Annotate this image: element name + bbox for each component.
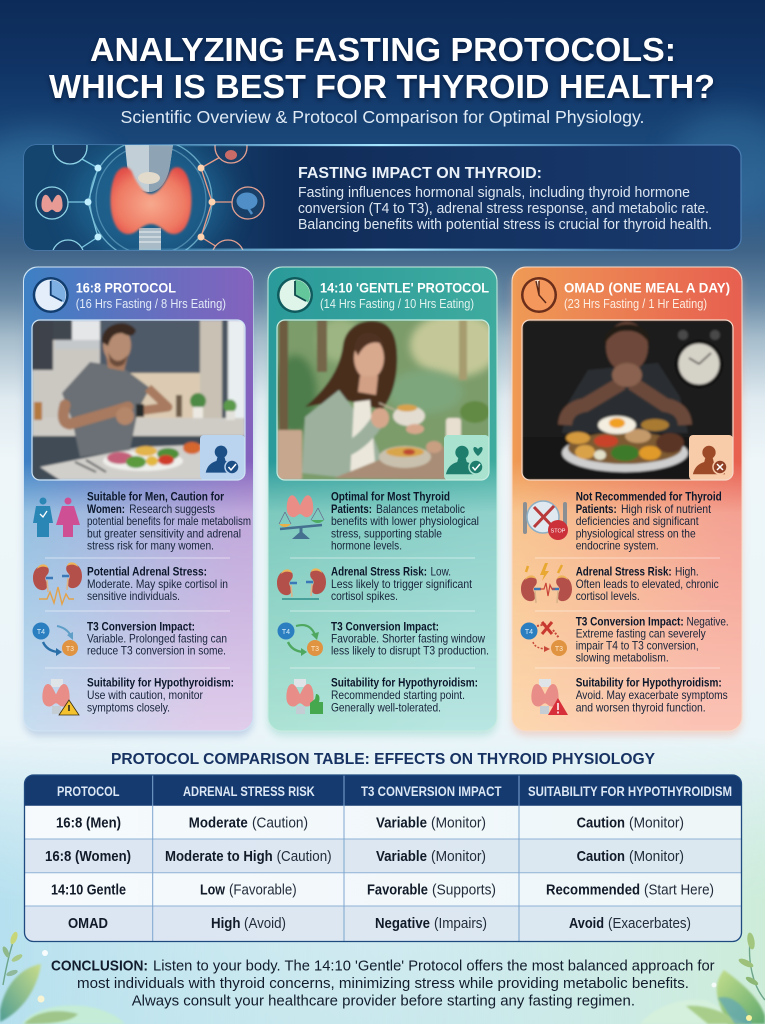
banner text: conversion (T4 to T3), adrenal stress response, and metabolic rate. [298,201,709,217]
icon: man and woman [33,498,80,537]
text: T3 conversion negative: impair T4 to T3 conversion, [576,639,699,653]
table header: PROTOCOL [57,784,120,799]
card heading: 16:8 PROTOCOL [76,280,176,296]
table row: 14:10 gentle: 14:10 Gentle [51,882,126,898]
icon: T4 to T3: T4 [37,629,45,636]
table row: OMAD: Avoid [569,915,604,932]
table row: 14:10 gentle: Recommended [546,882,640,898]
title: WHICH IS BEST FOR THYROID HEALTH? [49,68,715,105]
text: suitable for men: potential benefits for male metabolism [87,514,251,528]
text: T3 conversion favorable: less likely to disrupt T3 production. [331,644,489,658]
table row: OMAD: (Avoid) [244,915,286,932]
text: hypothyroidism suitability: symptoms closely. [87,700,170,714]
text: T3 conversion: T3 Conversion Impact: [87,619,195,633]
badge: suitable person [200,435,245,480]
text: hypothyroidism recommended: Recommended starting point. [331,688,465,702]
icon: thyroid on balance scale [279,495,324,539]
card subheading: (23 Hrs Fasting / 1 Hr Eating) [564,296,707,311]
text: not recommended: endocrine system. [576,538,659,552]
title [49,31,715,105]
text: hypothyroidism suitability: Use with caution, monitor [87,688,203,702]
banner text: Fasting influences hormonal signals, including thyroid hormone [298,185,690,201]
text: not recommended: Not Recommended for Thyroid [576,490,722,504]
subtitle: Scientific Overview & Protocol Comparison for Optimal Physiology. [120,107,644,127]
icon: thyroid with caution [42,679,79,715]
text: T3 conversion negative: Negative. [686,614,729,628]
table row: 16:8 men: (Monitor) [431,814,486,832]
table row: 16:8 women: (Caution) [277,848,332,865]
table row: 14:10 gentle [51,882,714,898]
text: T3 conversion negative [576,614,729,665]
card heading: OMAD (ONE MEAL A DAY) [564,280,730,296]
text: optimal for thyroid patients: benefits with lower physiological [331,514,479,528]
text: T3 conversion: Variable. Prolonged fasting can [87,632,227,646]
text: not recommended: physiological stress on the [576,526,696,540]
text: adrenal stress risk high [576,565,719,603]
icon: thyroid with thumbs up [286,679,323,714]
text: adrenal stress risk low [331,565,473,603]
table row: OMAD: OMAD [68,915,108,932]
text: optimal for thyroid patients: Balances metabolic [376,502,465,516]
conclusion: Always consult your healthcare provider before starting any fasting regimen. [132,993,635,1010]
text: adrenal stress risk low: Less likely to trigger significant [331,577,473,591]
table header [57,784,732,799]
table row: 14:10 gentle: (Start Here) [644,882,714,898]
thyroid gland [110,167,192,234]
text: optimal for thyroid patients: Optimal for Most Thyroid [331,490,450,504]
conclusion: Listen to your body. The 14:10 'Gentle' Protocol offers the most balanced approach for [153,958,715,975]
conclusion: most individuals with thyroid concerns, minimizing stress while providing metabolic benefits. [77,975,689,992]
badge: woman with heart [444,435,489,480]
icon: kidneys with stress wave [33,562,82,604]
table row: OMAD: Negative [375,915,430,932]
text: adrenal stress [87,565,228,603]
text: T3 conversion negative: slowing metabolism. [576,651,669,665]
icon: kidneys low stress [277,568,326,599]
text: adrenal stress risk high: cortisol levels. [576,589,640,603]
text: optimal for thyroid patients: Patients: [331,502,372,516]
text: adrenal stress risk low: cortisol spikes. [331,589,398,603]
icon: stressed kidneys [521,563,572,603]
text: adrenal stress risk high: High. [675,565,699,579]
icon: crossed plate and stop sign: STOP [551,528,566,534]
photo: stressed man with large meal and clock [522,320,733,480]
text: not recommended [576,490,722,552]
photo: man checking watch in kitchen [32,320,245,480]
text: suitable for men: but greater sensitivity and adrenal [87,526,241,540]
text: T3 conversion negative: Extreme fasting can severely [576,627,706,641]
table row: 14:10 gentle: Low [200,882,225,898]
text: adrenal stress risk high: Adrenal Stress Risk: [576,565,672,579]
table row: OMAD [68,915,691,932]
text: adrenal stress risk high: Often leads to elevated, chronic [576,577,719,591]
conclusion: CONCLUSION: [51,958,148,975]
table header: ADRENAL STRESS RISK [183,784,315,799]
table row: OMAD: (Exacerbates) [608,915,691,932]
card heading: 14:10 'GENTLE' PROTOCOL [320,280,489,296]
table heading: PROTOCOL COMPARISON TABLE: EFFECTS ON THYROID PHYSIOLOGY [111,751,655,768]
text: adrenal stress risk low: Adrenal Stress Risk: [331,565,427,579]
text: hypothyroidism recommended: Generally well-tolerated. [331,700,441,714]
table row: 16:8 women: (Monitor) [431,848,486,865]
text: hypothyroidism avoid: Avoid. May exacerbate symptoms [576,688,728,702]
table row: 16:8 men: Moderate [189,814,248,832]
table row: 16:8 men [56,814,684,832]
trachea [125,145,173,192]
text: not recommended: High risk of nutrient [621,502,712,516]
text: hypothyroidism recommended [331,676,478,714]
panel: OMAD protocol [512,267,742,736]
table row: 16:8 women: Caution [577,848,625,865]
text: hypothyroidism avoid [576,676,728,714]
text: adrenal stress: sensitive individuals. [87,589,180,603]
banner heading: FASTING IMPACT ON THYROID: [298,165,542,182]
icon: T4 to T3 favorable [278,622,323,656]
table row: OMAD: (Impairs) [434,915,487,932]
illustration: thyroid network [24,145,265,250]
text: hypothyroidism suitability: Suitability for Hypothyroidism: [87,676,234,690]
table row: 16:8 men: 16:8 (Men) [56,814,121,832]
table header: T3 CONVERSION IMPACT [361,784,502,799]
banner text: Balancing benefits with potential stress is crucial for thyroid health. [298,217,712,233]
table header: SUITABILITY FOR HYPOTHYROIDISM [528,784,732,799]
table row: 16:8 women: Variable [376,848,427,865]
icon: T4 to T3 [32,622,78,656]
table row: 16:8 women: 16:8 (Women) [45,848,131,865]
table row: 14:10 gentle: (Supports) [432,882,496,898]
icon: impaired T4 to T3: T4 [525,629,533,636]
text: suitable for men: stress risk for many women. [87,538,214,552]
text: T3 conversion favorable [331,619,489,658]
panel: fasting impact on thyroid [23,144,742,251]
icon: impaired T4 to T3 [520,622,567,656]
text: suitable for men: Suitable for Men, Caution for [87,490,224,504]
panel: 14:10 gentle protocol [268,267,500,736]
text: T3 conversion: reduce T3 conversion in some. [87,644,226,658]
icon: T4 to T3: T3 [66,646,74,653]
icon: impaired T4 to T3: T3 [555,646,563,653]
text: hypothyroidism avoid: Suitability for Hypothyroidism: [576,676,722,690]
text: T3 conversion negative: T3 Conversion Impact: [576,614,684,628]
table row: 14:10 gentle: (Favorable) [229,882,297,898]
icon: T4 to T3 favorable: T3 [311,646,319,653]
icon: clock 16:8 [33,277,69,313]
table row: 14:10 gentle: Favorable [367,882,428,898]
decorative leaves: bottom left [0,931,125,1024]
table row: 16:8 women [45,848,684,865]
table row: 16:8 men: (Caution) [252,814,308,832]
text: hypothyroidism suitability [87,676,234,714]
text: suitable for men [87,490,251,552]
badge: person not recommended [689,435,733,480]
card subheading: (16 Hrs Fasting / 8 Hrs Eating) [76,296,226,311]
title: ANALYZING FASTING PROTOCOLS: [90,31,676,68]
text: T3 conversion favorable: Favorable. Shorter fasting window [331,632,485,646]
text: not recommended: deficiencies and significant [576,514,699,528]
text: hypothyroidism recommended: Suitability for Hypothyroidism: [331,676,478,690]
text: optimal for thyroid patients: stress, supporting stable [331,526,442,540]
text: T3 conversion favorable: T3 Conversion Impact: [331,619,439,633]
text: T3 conversion [87,619,227,658]
text: adrenal stress risk low: Low. [430,565,451,579]
text: adrenal stress: Moderate. May spike cortisol in [87,577,228,591]
table row: OMAD: High [211,915,240,932]
table row: 16:8 men: Variable [376,814,427,832]
icon: clock OMAD [521,277,557,313]
text: suitable for men: Research suggests [129,502,215,516]
decorative leaves: bottom right [640,932,765,1024]
photo: woman eating a bowl outdoors [278,320,488,480]
icon: T4 to T3 favorable: T4 [282,629,290,636]
table row: 16:8 women: (Monitor) [629,848,684,865]
text: suitable for men: Women: [87,502,125,516]
icon: clock 14:10 [277,277,313,313]
text: hypothyroidism avoid: and worsen thyroid function. [576,700,706,714]
text: optimal for thyroid patients [331,490,479,552]
icon: crossed plate and stop sign [523,501,568,540]
text: adrenal stress: Potential Adrenal Stress: [87,565,207,579]
table row: 16:8 men: (Monitor) [629,814,684,832]
icon: thyroid with red warning [531,679,568,715]
conclusion [51,958,715,1010]
comparison table [24,775,742,942]
card subheading: (14 Hrs Fasting / 10 Hrs Eating) [320,296,474,311]
panel: 16:8 protocol [24,267,253,736]
table row: 16:8 men: Caution [577,814,625,832]
banner text [298,185,712,233]
text: optimal for thyroid patients: hormone levels. [331,538,402,552]
table row: 16:8 women: Moderate to High [165,848,273,865]
text: not recommended: Patients: [576,502,617,516]
